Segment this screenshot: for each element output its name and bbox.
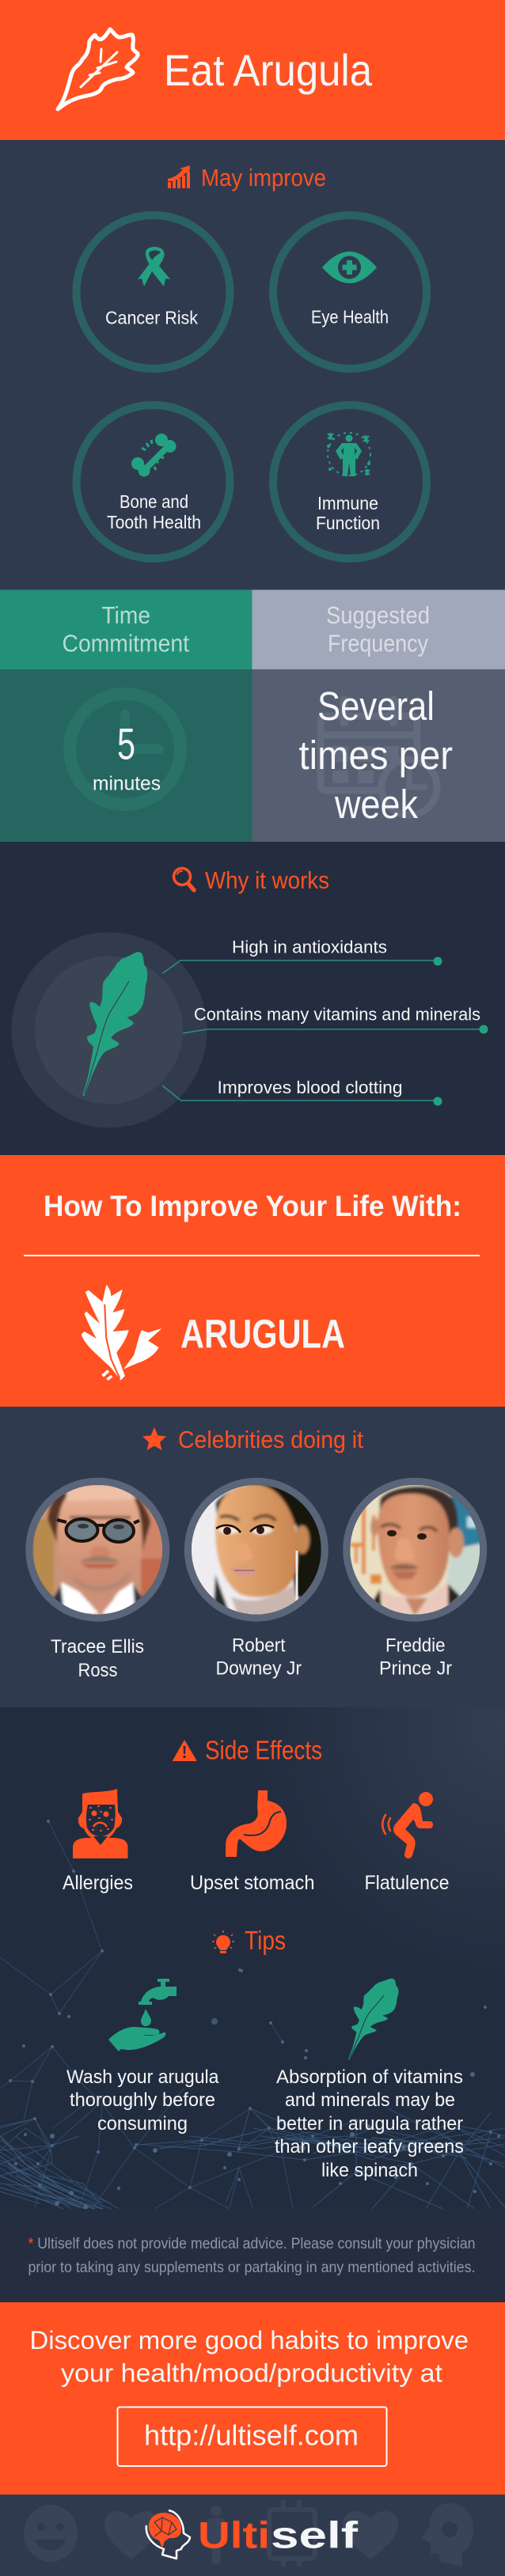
- callout: high in antioxidants: High in antioxidants: [232, 937, 387, 957]
- heading: may improve: May improve: [201, 164, 326, 191]
- heading: tips: [212, 1926, 286, 1955]
- heading: tips: Tips: [245, 1926, 286, 1955]
- item: upset stomach: Upset stomach: [190, 1872, 315, 1894]
- logo: ultiself: [146, 2510, 358, 2559]
- value: several times per week: [299, 684, 453, 827]
- callout: blood clotting: Improves blood clotting: [217, 1078, 402, 1097]
- icon: arugula leaf: [83, 952, 147, 1096]
- tip: absorption: [275, 1979, 464, 2181]
- item: flatulence: [364, 1792, 450, 1894]
- heading: why it works: Why it works: [205, 866, 329, 894]
- celebrity portrait: Freddie Prince Jr slot: Freddie: [385, 1635, 445, 1657]
- panel: side effects and tips background: [0, 1707, 505, 2209]
- icon: stomach: [226, 1790, 287, 1857]
- title: Eat Arugula: [164, 45, 373, 95]
- heading: side effects: Side Effects: [205, 1736, 322, 1764]
- panel: side effects: [63, 1736, 450, 1894]
- header banner: [0, 0, 505, 140]
- callout: blood clotting: [162, 1078, 442, 1106]
- heading: suggested frequency: Suggested: [326, 601, 430, 629]
- disclaimer: prior to taking any supplements or partaking in any mentioned activities.: [28, 2260, 475, 2276]
- tip: wash: [66, 1979, 219, 2135]
- icon: arugula leaf: [348, 1979, 399, 2059]
- circle: immune function: Immune: [317, 493, 378, 513]
- icon: bent figure: [382, 1792, 433, 1858]
- heading: time commitment: Time: [101, 601, 150, 629]
- circle: bone and tooth health: [76, 405, 230, 559]
- panel: call to action: [0, 2302, 505, 2495]
- circle: immune function: [273, 405, 427, 559]
- icon: eye with cross: [322, 252, 377, 283]
- icon: leaf outline: [58, 29, 138, 109]
- tip: absorption: Absorption of vitamins: [276, 2066, 463, 2088]
- disclaimer: * Ultiself does not provide medical advice. Please consult your physician: [28, 2236, 476, 2252]
- icon: magnifier: [174, 869, 194, 890]
- icon: allergic face: [73, 1789, 128, 1858]
- tip: absorption: than other leafy greens: [275, 2136, 464, 2157]
- icon: ghost clock: [70, 694, 180, 805]
- icon: light bulb: [212, 1930, 234, 1953]
- heading: time commitment: [62, 601, 189, 657]
- tip: wash: Wash your arugula: [66, 2066, 219, 2088]
- panel: celebrities: [0, 1407, 505, 1707]
- tip: absorption: and minerals may be: [285, 2089, 455, 2111]
- celebrity portrait: Robert Downey Jr slot: Robert: [232, 1635, 286, 1657]
- heading: suggested frequency: Frequency: [328, 630, 428, 657]
- heading: celebrities doing it: Celebrities doing it: [178, 1426, 363, 1453]
- celebrity portrait: Tracee Ellis Ross slot: Tracee Ellis: [51, 1636, 144, 1657]
- circle: eye health: Eye Health: [311, 307, 389, 328]
- title: arugula: ARUGULA: [180, 1312, 345, 1356]
- icon: star: [142, 1427, 166, 1450]
- icon: tap and hand: [108, 1979, 177, 2051]
- circle: immune function: Function: [316, 513, 380, 533]
- celebrity portrait: Freddie Prince Jr slot: Prince Jr: [379, 1658, 452, 1679]
- diagram: arugula benefits: [11, 932, 488, 1128]
- circle: eye health: [273, 215, 427, 369]
- circle: cancer risk: Cancer Risk: [105, 307, 198, 328]
- logo: ultiself: self: [271, 2514, 358, 2555]
- panel: why it works: [0, 842, 505, 1155]
- callout: vitamins and minerals: Contains many vitamins and minerals: [194, 1005, 480, 1024]
- celebrity portrait: Freddie Prince Jr slot: [347, 1481, 484, 1679]
- value: several times per week: times per: [299, 733, 453, 778]
- panel: suggested frequency: [252, 590, 505, 842]
- value: several times per week: week: [334, 782, 418, 827]
- tip: wash: thoroughly before: [70, 2089, 215, 2111]
- tip: wash: consuming: [97, 2113, 188, 2135]
- text: discover more: Discover more good habits to improve: [30, 2326, 469, 2354]
- callout: high in antioxidants: [162, 937, 442, 973]
- tip: absorption: better in arugula rather: [276, 2113, 463, 2135]
- tip: absorption: like spinach: [321, 2160, 418, 2181]
- celebrity portrait: Robert Downey Jr slot: Downey Jr: [215, 1658, 302, 1679]
- heading: how to improve: How To Improve Your Life With:: [44, 1190, 461, 1222]
- disclaimer: [0, 2209, 505, 2302]
- icon: bone: [131, 434, 176, 476]
- icon: immune figure: [327, 433, 370, 476]
- heading: suggested frequency: [326, 601, 430, 657]
- callout: vitamins and minerals: [183, 1005, 488, 1033]
- footer: [0, 2495, 505, 2576]
- panel: how to improve banner: [0, 1155, 505, 1407]
- item: flatulence: Flatulence: [364, 1872, 450, 1894]
- item: allergies: [63, 1789, 133, 1894]
- text: discover more: your health/mood/productivity at: [61, 2359, 442, 2388]
- icon: arugula white: [82, 1285, 162, 1381]
- value: five minutes: minutes: [93, 772, 161, 794]
- text: discover more: [30, 2326, 469, 2388]
- ghost icons: [24, 2500, 473, 2567]
- item: allergies: Allergies: [63, 1872, 133, 1894]
- celebrity portrait: Tracee Ellis Ross slot: [29, 1481, 169, 1681]
- item: upset stomach: [190, 1790, 315, 1894]
- icon: ribbon: [138, 247, 170, 286]
- logo: ultiself: Ulti: [198, 2514, 270, 2555]
- value: five minutes: 5: [117, 718, 135, 769]
- panel: time commitment: [0, 590, 252, 842]
- value: five minutes: [93, 718, 161, 794]
- heading: side effects: [173, 1736, 322, 1764]
- circle: cancer risk: [76, 215, 230, 369]
- circle: bone and tooth health: Bone and: [120, 491, 188, 512]
- icon: warning triangle: [173, 1741, 196, 1761]
- panel: tips: [66, 1926, 464, 2181]
- button: url: [117, 2407, 386, 2466]
- celebrity portrait: Robert Downey Jr slot: [186, 1481, 328, 1679]
- icon: rising chart: [168, 165, 190, 188]
- panel: may improve: [0, 140, 505, 590]
- button: url: http://ultiself.com: [144, 2419, 359, 2451]
- circle: bone and tooth health: Tooth Health: [107, 512, 201, 532]
- icon: ghost calendar: [321, 700, 437, 815]
- celebrity portrait: Tracee Ellis Ross slot: Ross: [78, 1660, 117, 1681]
- value: several times per week: Several: [317, 684, 435, 729]
- heading: time commitment: Commitment: [62, 630, 189, 657]
- icon: brain head: [146, 2510, 190, 2559]
